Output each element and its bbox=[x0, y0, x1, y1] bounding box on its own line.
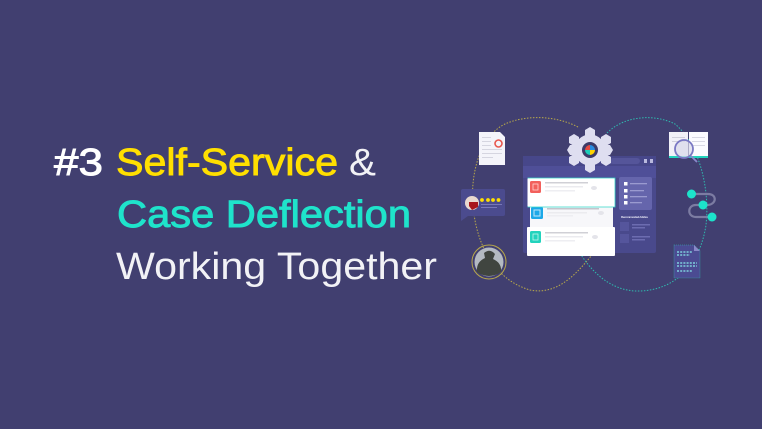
card 1 bbox=[528, 178, 615, 207]
recommended articles: Recommended Articles bbox=[621, 215, 648, 219]
icon: document bbox=[479, 132, 505, 165]
icon: open book with magnifier bbox=[669, 132, 708, 162]
icon: calendar document bbox=[674, 245, 700, 278]
avatar photo bbox=[472, 245, 506, 279]
review avatar bbox=[465, 196, 479, 210]
sidebar checklist bbox=[619, 177, 652, 210]
card 2 bbox=[530, 205, 613, 228]
icon: gear bbox=[567, 127, 613, 173]
title: #3 bbox=[54, 142, 103, 184]
workflow path with check nodes bbox=[687, 190, 716, 222]
star rating bbox=[480, 198, 500, 202]
dotted loop: right teal bbox=[578, 118, 707, 291]
title: & bbox=[349, 142, 376, 184]
title: Working Together bbox=[116, 246, 437, 288]
card 3 bbox=[527, 227, 615, 256]
review bubble bbox=[461, 189, 505, 221]
title: Case Deflection bbox=[117, 194, 411, 236]
title: Self-Service bbox=[116, 142, 338, 184]
app window panel bbox=[523, 156, 656, 253]
title bbox=[54, 142, 437, 288]
dotted loop: left gold bbox=[473, 118, 600, 291]
illustration bbox=[461, 118, 716, 291]
magnifier bbox=[675, 140, 697, 162]
